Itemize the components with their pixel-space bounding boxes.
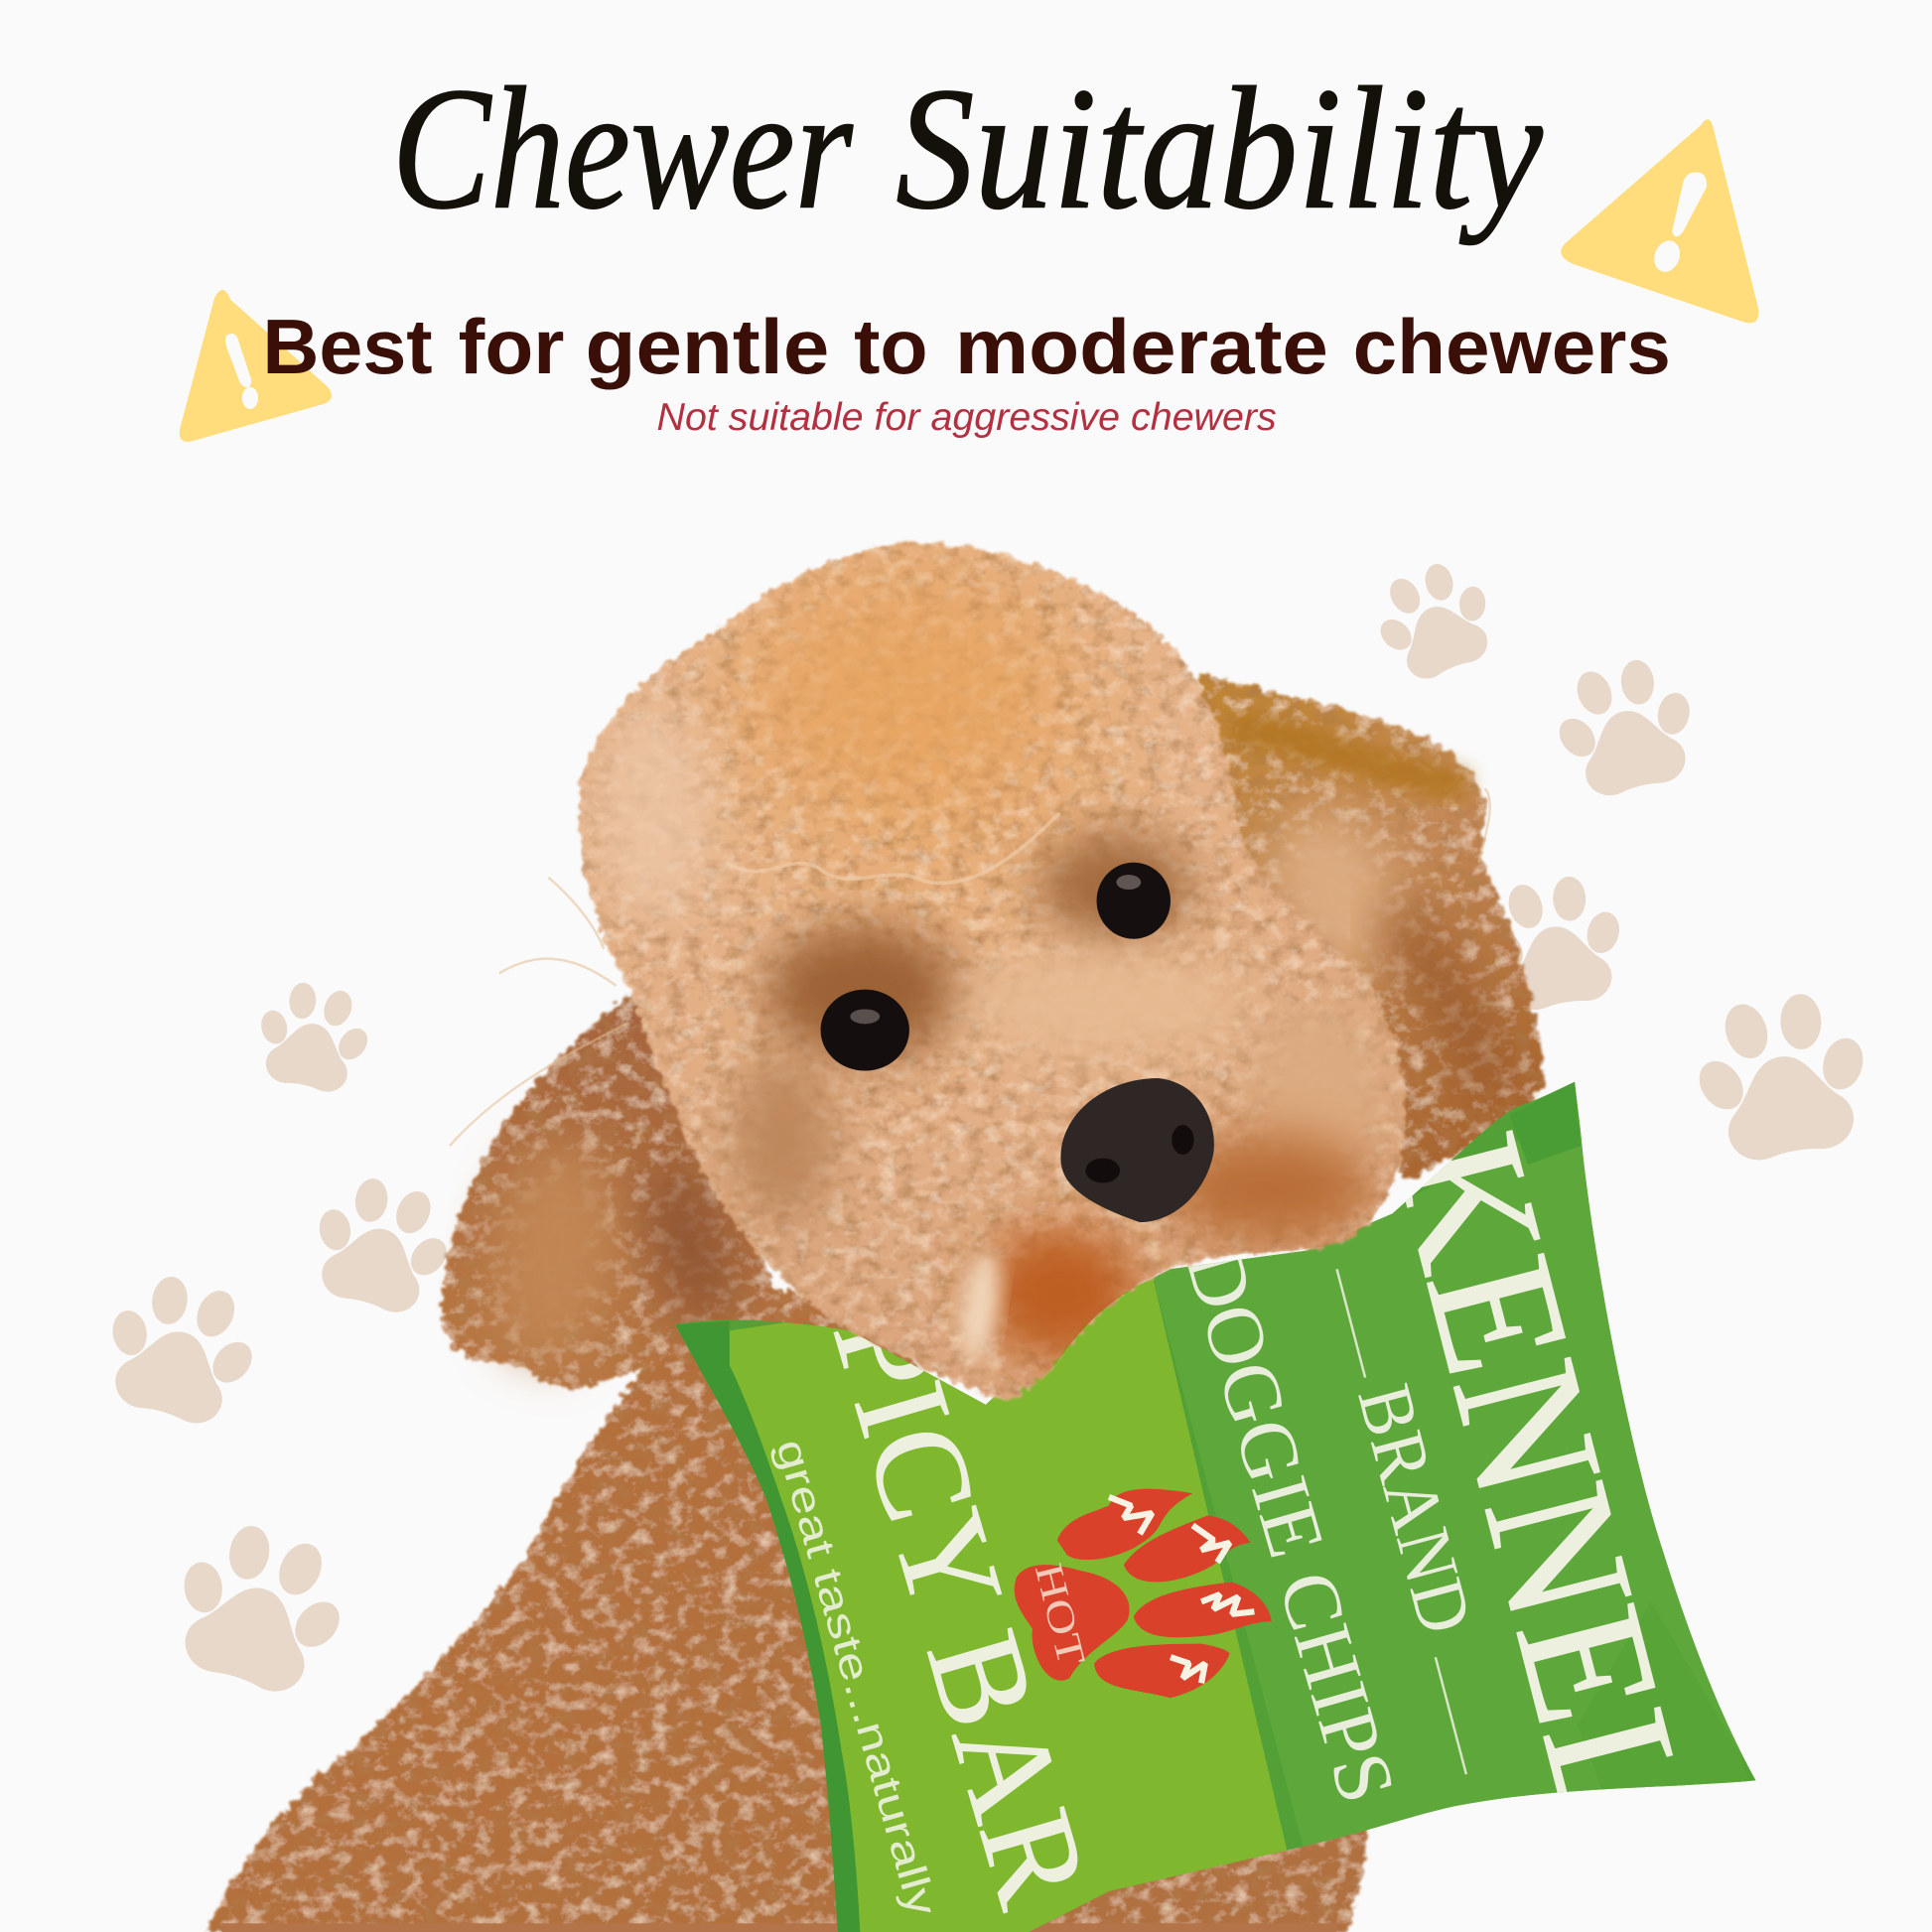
muzzle light — [961, 952, 1257, 1056]
paw prints — [86, 548, 1885, 1708]
paw print behind ear — [1471, 866, 1637, 1018]
KENNEL lettering: KENNEL — [1356, 1115, 1727, 1846]
dog photo illustration — [207, 542, 1756, 1932]
eye shadow left — [763, 924, 961, 1059]
muzzle right shade — [1251, 1004, 1386, 1189]
HOT label: HOT — [1027, 1559, 1094, 1670]
dog right ear — [1195, 673, 1545, 1207]
subtitle: chewers — [1353, 303, 1671, 390]
SPICY BARK lettering: SPICY BAR — [784, 1223, 1118, 1922]
forehead highlight — [746, 579, 1053, 801]
paw print left middle — [296, 1164, 468, 1323]
paw print far right — [1679, 981, 1885, 1170]
white tuft — [953, 1247, 1006, 1365]
stray hair wisps — [450, 788, 1490, 1146]
subtitle: to — [854, 303, 928, 390]
icon: warning triangle right — [1561, 119, 1758, 323]
DOGGIE CHIPS lettering: DOGGIE CHIPS — [1169, 1237, 1413, 1813]
warning note: Not suitable for aggressive chewers — [656, 396, 1277, 439]
toy pillow — [675, 1082, 1756, 1932]
hot paw flame highlights — [1109, 1497, 1254, 1683]
icon: hot paw logo — [1015, 1489, 1272, 1698]
title: Chewer — [392, 53, 854, 245]
pillow seams — [675, 1320, 860, 1932]
title: Suitability — [896, 53, 1544, 245]
subtitle: moderate — [955, 303, 1328, 390]
cheek shadow — [731, 1053, 834, 1226]
paw print far left — [86, 1261, 275, 1436]
paw print top centre — [1358, 548, 1510, 692]
paw print lower left — [153, 1506, 367, 1708]
title — [392, 52, 1544, 245]
eye shadow right — [1038, 832, 1191, 942]
dog left ear — [443, 992, 788, 1387]
right eye — [1097, 863, 1171, 939]
dog body — [207, 1282, 1370, 1932]
subtitle — [262, 303, 1671, 390]
icon: warning triangle left — [180, 290, 332, 442]
pale left head — [592, 702, 715, 924]
left eye — [821, 990, 909, 1070]
BRAND lettering: BRAND — [1341, 1376, 1489, 1642]
subtitle: for — [459, 303, 564, 390]
dog head — [580, 542, 1406, 1398]
paw print left upper — [245, 973, 382, 1099]
chin orange shade — [980, 1226, 1140, 1361]
nose — [1060, 1078, 1214, 1222]
pillow divider lines — [1337, 1269, 1466, 1774]
subtitle: Best — [262, 303, 433, 390]
subtitle: gentle — [586, 303, 829, 390]
tagline lettering: great taste...naturally — [767, 1434, 946, 1921]
forehead curls — [727, 813, 1059, 884]
paw print upper right — [1540, 646, 1712, 806]
pillow light band — [730, 1269, 1307, 1932]
